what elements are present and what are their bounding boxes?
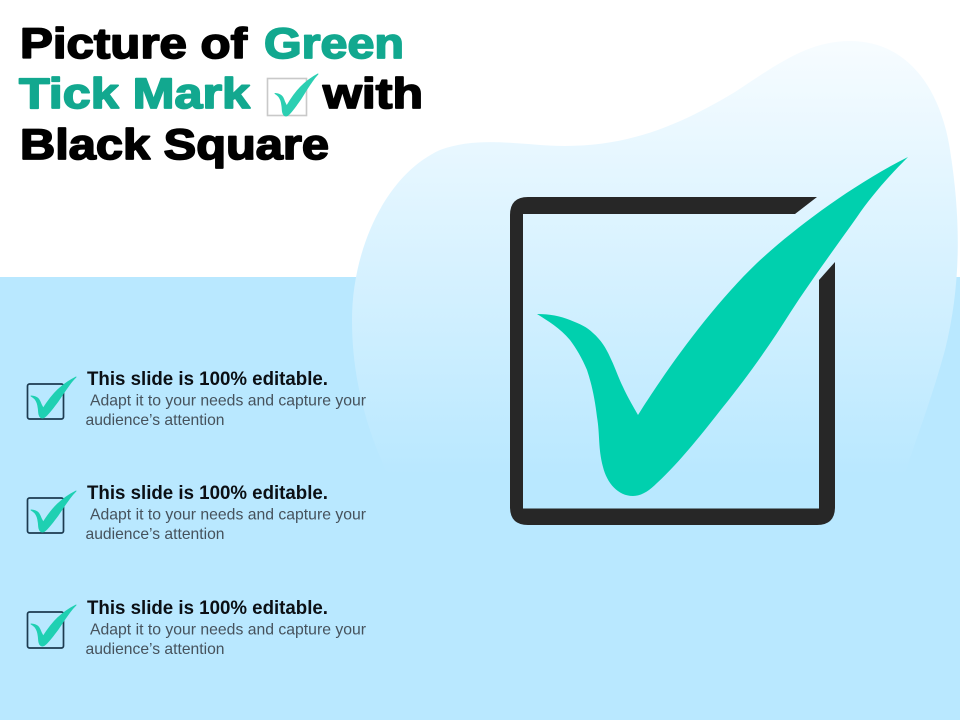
- list item 2: [28, 483, 367, 543]
- title: Tick Mark: [19, 70, 250, 118]
- title: Green: [264, 20, 404, 68]
- title: [19, 20, 423, 169]
- heading 1: This slide is 100% editable.: [87, 369, 328, 390]
- title: Picture of: [20, 20, 248, 68]
- background blob shape: [352, 41, 958, 490]
- body text 3: audience’s attention: [86, 641, 224, 658]
- body text 2: audience’s attention: [86, 526, 224, 543]
- heading 2: This slide is 100% editable.: [87, 483, 328, 504]
- body text 1: [86, 392, 367, 429]
- title: with: [322, 70, 423, 118]
- body text 3: Adapt it to your needs and capture your: [90, 622, 367, 638]
- body text 3: [86, 622, 367, 658]
- body text 2: Adapt it to your needs and capture your: [90, 506, 367, 524]
- body text 2: [86, 506, 367, 543]
- body text 1: audience’s attention: [86, 412, 224, 429]
- icon: small tick box 1: [28, 377, 76, 419]
- list item 3: [28, 598, 367, 658]
- light blue background band: [0, 277, 960, 720]
- title: Black Square: [20, 121, 329, 169]
- list item 1: [28, 369, 367, 429]
- icon: large black square with green tick: [510, 157, 908, 525]
- heading 3: This slide is 100% editable.: [87, 598, 328, 619]
- black square frame: [510, 197, 835, 525]
- body text 1: Adapt it to your needs and capture your: [90, 392, 367, 410]
- green tick: [537, 157, 908, 496]
- icon: title inline tick box: [268, 74, 318, 116]
- icon: small tick box 2: [28, 491, 76, 533]
- icon: small tick box 3: [28, 605, 76, 648]
